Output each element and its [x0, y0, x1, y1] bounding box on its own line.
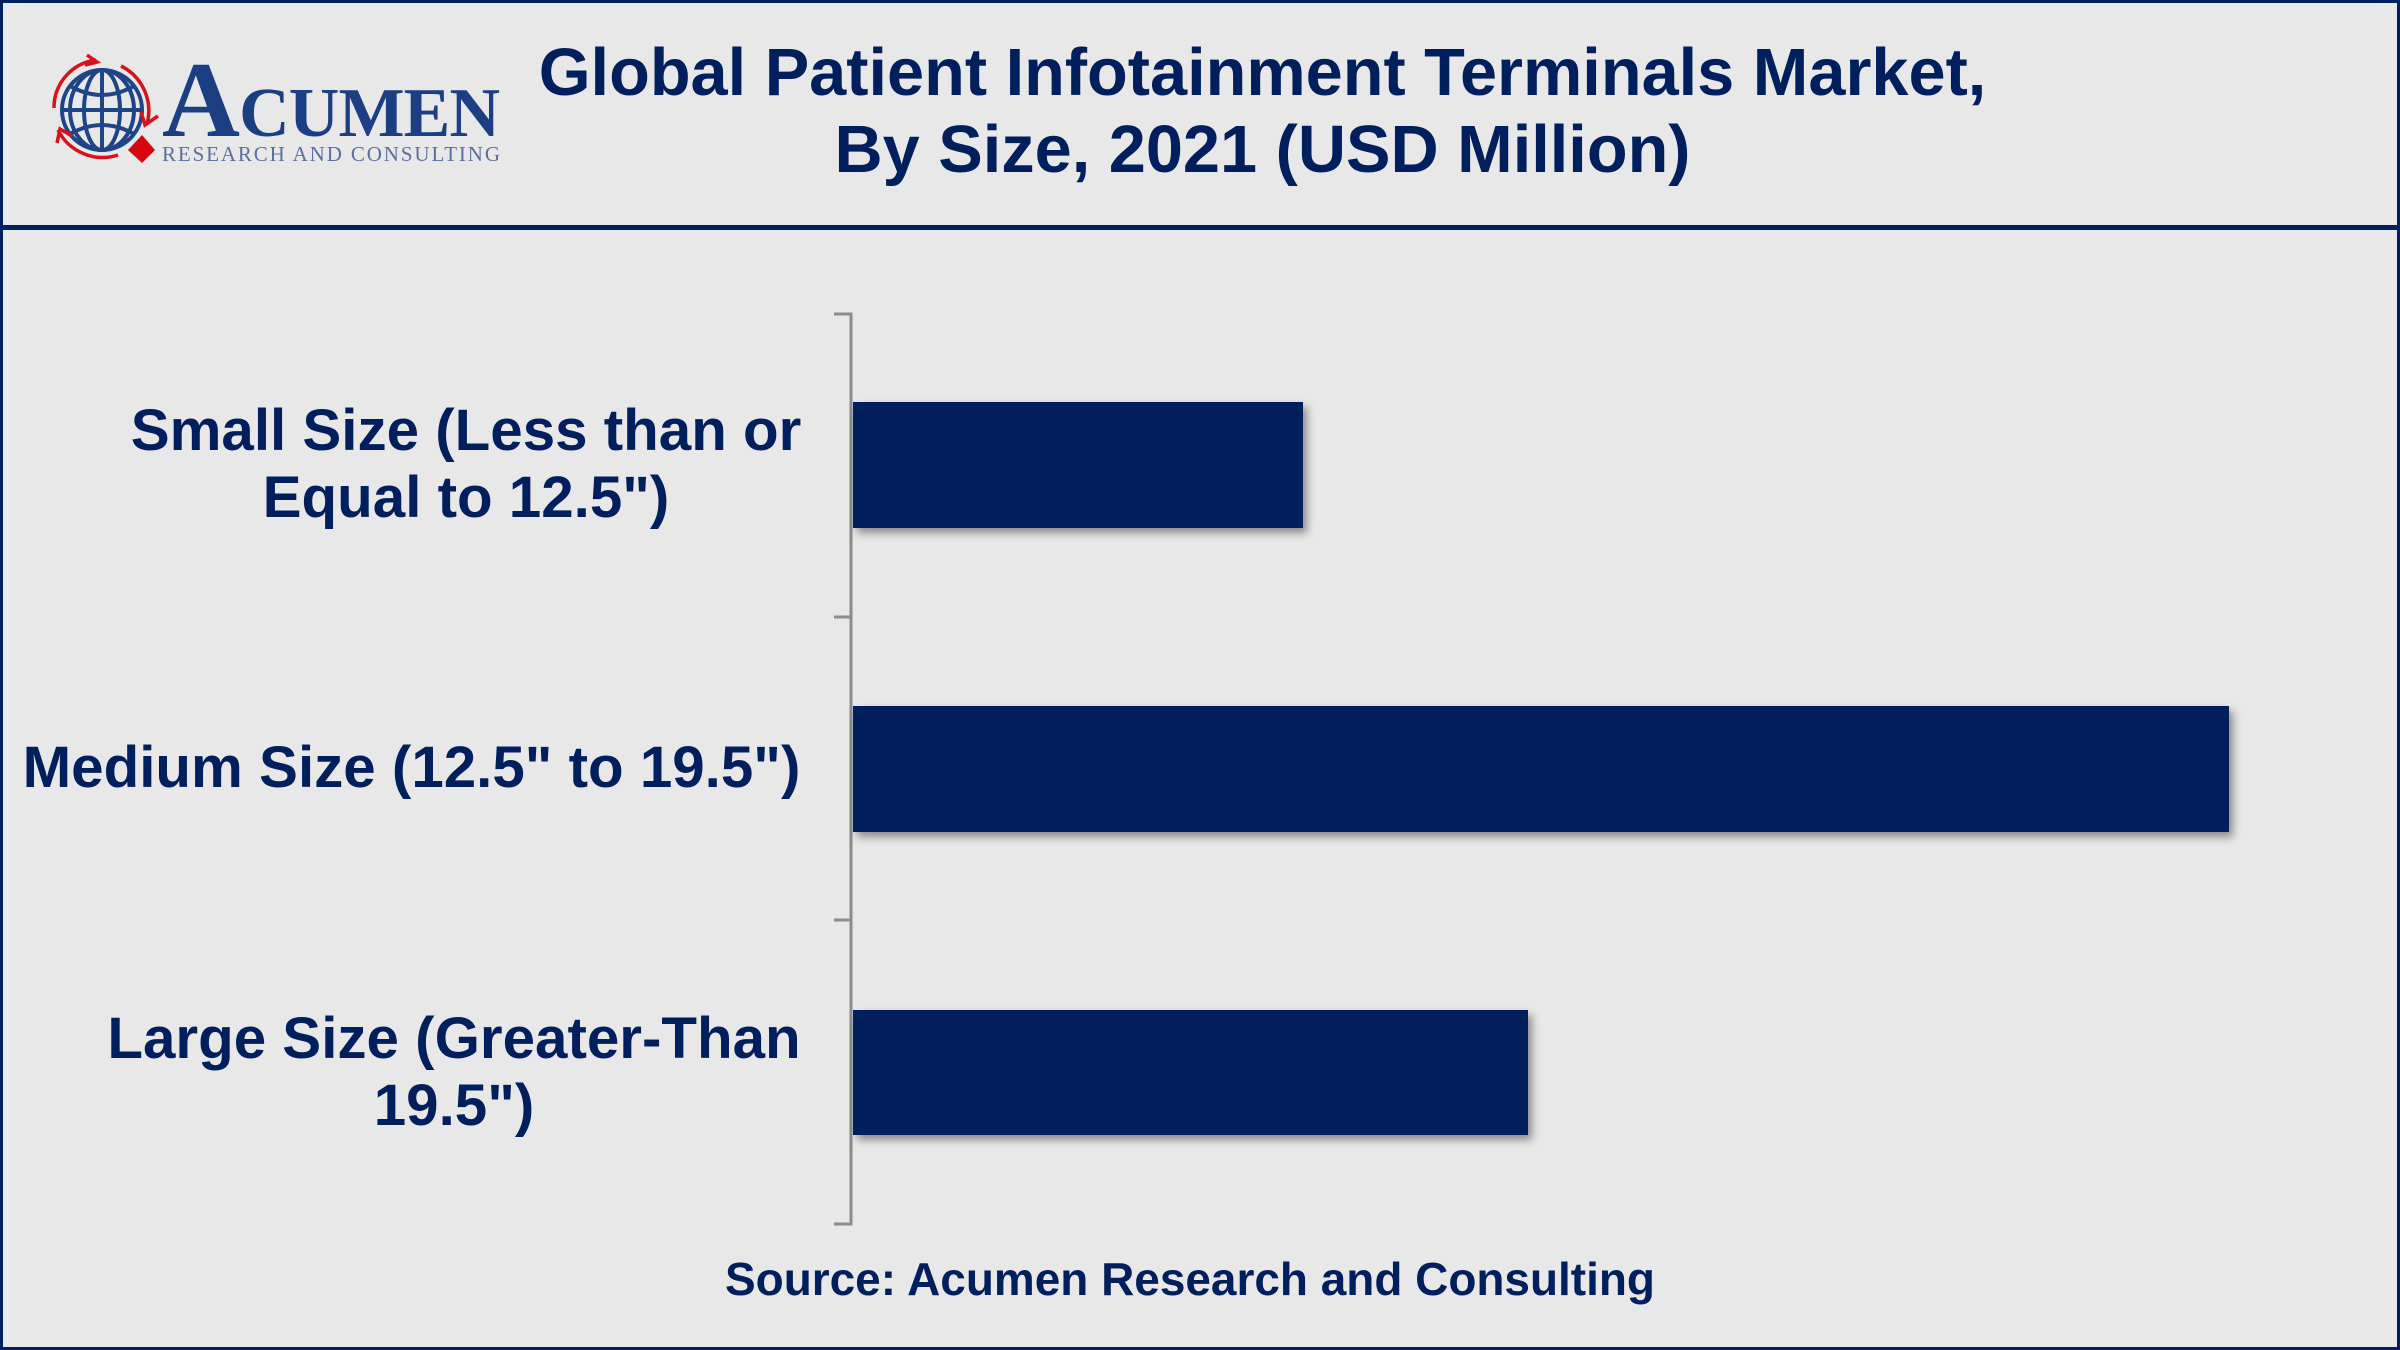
- label: small size: Equal to 12.5"): [263, 464, 669, 530]
- logo tagline: RESEARCH AND CONSULTING: [162, 142, 500, 166]
- bar: small size: [853, 402, 1303, 528]
- icon: globe: [62, 70, 142, 150]
- label: large size: Large Size (Greater-Than: [107, 1006, 801, 1071]
- title: By Size, 2021 (USD Million): [834, 113, 1691, 187]
- bar: medium size: [853, 706, 2229, 832]
- label: large size: [107, 1006, 801, 1138]
- label: small size: [131, 398, 801, 530]
- source note: Source: Acumen Research and Consulting: [725, 1253, 1655, 1305]
- header divider: [0, 225, 2400, 230]
- title: Global Patient Infotainment Terminals Market,: [539, 36, 1986, 110]
- icon: red circular arrows: [54, 55, 158, 157]
- title: [539, 36, 1986, 187]
- bar: large size: [853, 1010, 1528, 1135]
- label: small size: Small Size (Less than or: [131, 398, 801, 463]
- logo wordmark: ACUMEN: [162, 41, 500, 160]
- label: large size: 19.5"): [374, 1072, 534, 1138]
- logo: Acumen Research and Consulting: [52, 41, 500, 166]
- label: medium size: Medium Size (12.5" to 19.5"): [23, 735, 800, 800]
- icon: red diamond: [128, 135, 155, 163]
- chart axis: [834, 312, 852, 1226]
